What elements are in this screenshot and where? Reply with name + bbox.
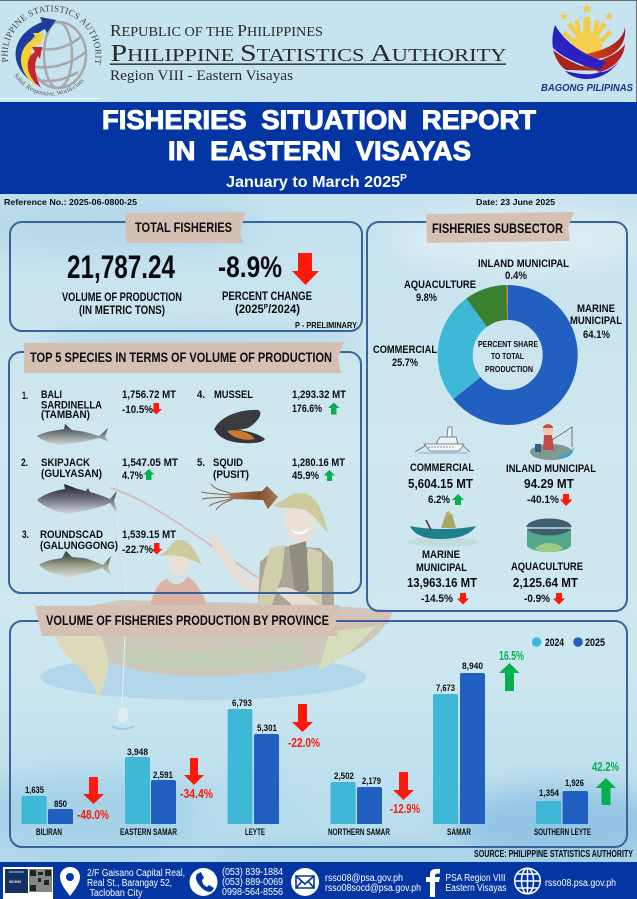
species 3: roundscad: ROUNDSCAD xyxy=(40,529,103,541)
subtitle: P xyxy=(400,173,407,184)
species 4: mussel: MUSSEL xyxy=(214,389,253,401)
icon: commercial fishing ship xyxy=(415,427,470,453)
icon: mussel xyxy=(214,410,265,443)
species 1: bali sardinella: -10.5% xyxy=(122,404,153,416)
label: aquaculture share xyxy=(404,279,476,304)
chart legend: 2025 xyxy=(585,637,605,649)
change: Samar xyxy=(499,648,524,691)
header: agency text: PHILIPPINE STATISTICS AUTHORITY xyxy=(110,41,506,67)
volume label: (IN METRIC TONS) xyxy=(79,303,165,317)
volume label xyxy=(62,290,182,317)
panel: total fisheries xyxy=(10,212,362,331)
bar group: Eastern Samar: EASTERN SAMAR xyxy=(120,827,177,837)
email addresses: rsso08socd@psa.gov.ph xyxy=(325,883,421,894)
donut centre label xyxy=(478,339,538,374)
change: Samar: 16.5% xyxy=(499,648,524,663)
percent change figure: -8.9% xyxy=(218,251,282,284)
bar group: Leyte: 5,301 xyxy=(257,723,278,734)
subtitle: January to March 2025 xyxy=(226,174,393,191)
species 4: mussel: 4. xyxy=(197,389,205,401)
icon: phone xyxy=(190,868,218,896)
bar group: Eastern Samar: 2,591 xyxy=(153,770,174,781)
species 2: skipjack: 2. xyxy=(21,457,28,469)
label: aquaculture share: 9.8% xyxy=(416,292,437,304)
aquaculture figures: -0.9% xyxy=(524,593,550,605)
panel: top 5 species xyxy=(9,342,361,593)
heading: top 5 species: TOP 5 SPECIES IN TERMS OF VOLUME OF PRODUCTION xyxy=(30,349,332,365)
label: commercial share: COMMERCIAL xyxy=(373,344,437,356)
top and right frame edges xyxy=(0,0,637,102)
icon: down arrow xyxy=(150,403,162,414)
address: Tacloban City xyxy=(90,888,142,899)
aquaculture figures xyxy=(511,518,583,605)
icon: aquaculture fish cage xyxy=(526,518,572,552)
heading: production by province: VOLUME OF FISHERIES PRODUCTION BY PROVINCE xyxy=(46,612,329,628)
bar group: Northern Samar: 2,179 xyxy=(362,776,381,787)
heading: production by province xyxy=(35,605,339,636)
species 1: bali sardinella: SARDINELLA xyxy=(41,400,102,412)
heading: total fisheries: TOTAL FISHERIES xyxy=(135,219,232,235)
label: inland municipal share xyxy=(478,258,569,282)
total volume figure: 21,787.24 xyxy=(67,249,175,285)
bar group: Biliran: 1,635 xyxy=(25,785,45,796)
volume label: VOLUME OF PRODUCTION xyxy=(62,290,182,304)
donut centre label: TO TOTAL xyxy=(491,351,524,361)
heading: top 5 species xyxy=(24,342,344,373)
icon: email xyxy=(291,868,319,896)
ISO badge and QR code: ISO 9001 xyxy=(9,879,22,884)
species 5: squid: SQUID xyxy=(213,457,243,469)
title: IN EASTERN VISAYAS xyxy=(168,136,471,166)
phone numbers: (053) 889-0069 xyxy=(222,877,283,888)
heading: fisheries subsector: FISHERIES SUBSECTOR xyxy=(432,220,563,236)
label: marine municipal share: MUNICIPAL xyxy=(570,315,622,327)
icon: large red down arrow xyxy=(292,253,319,285)
bar group: Southern Leyte: 1,926 xyxy=(565,778,584,789)
species 5: squid: 45.9% xyxy=(292,470,319,482)
bar group: Southern Leyte: 1,354 xyxy=(539,788,560,799)
facebook page: Eastern Visayas xyxy=(446,883,506,894)
bar group: Samar: SAMAR xyxy=(447,827,471,837)
change: Southern Leyte: 42.2% xyxy=(592,759,619,774)
icon: down arrow xyxy=(457,593,469,604)
bar group: Northern Samar: 2,502 xyxy=(334,771,354,782)
bar group: Biliran: 850 xyxy=(54,799,67,810)
bar group: Biliran: BILIRAN xyxy=(36,827,62,837)
commercial figures: COMMERCIAL xyxy=(410,462,474,474)
icon: up arrow xyxy=(452,494,464,505)
percent change label: P xyxy=(264,304,268,311)
inland municipal figures: 94.29 MT xyxy=(524,476,574,491)
label: commercial share xyxy=(373,344,437,369)
icon: globe xyxy=(515,868,540,894)
bar group: Northern Samar: NORTHERN SAMAR xyxy=(328,827,390,837)
change: Northern Samar: -12.9% xyxy=(390,801,420,816)
species 3: roundscad: 1,539.15 MT xyxy=(122,529,176,541)
marine municipal figures: 13,963.16 MT xyxy=(407,575,477,590)
bar group: Leyte xyxy=(228,698,320,837)
species 3: roundscad xyxy=(22,529,176,580)
bar group: Southern Leyte xyxy=(534,759,619,837)
chart legend: 2024 xyxy=(545,637,565,649)
commercial figures: 5,604.15 MT xyxy=(408,476,473,491)
aquaculture figures: 2,125.64 MT xyxy=(513,575,578,590)
address xyxy=(87,868,185,899)
header: agency text xyxy=(110,21,506,84)
watercolor background xyxy=(0,194,637,869)
percent change label: PERCENT CHANGE xyxy=(222,289,312,303)
label: inland municipal share: INLAND MUNICIPAL xyxy=(478,258,569,270)
header: PSA logo xyxy=(0,5,102,99)
bar group: Biliran xyxy=(22,777,109,837)
species 2: skipjack: (GULYASAN) xyxy=(41,468,102,480)
bar group: Samar: 8,940 xyxy=(462,661,483,672)
change: Biliran: -48.0% xyxy=(77,807,109,822)
species 3: roundscad: 3. xyxy=(22,529,29,541)
email addresses xyxy=(325,873,421,894)
icon: location pin xyxy=(60,867,80,896)
bar group: Eastern Samar xyxy=(120,747,213,837)
species 4: mussel xyxy=(197,389,346,443)
phone numbers: 0998-564-8556 xyxy=(222,887,283,898)
marine municipal figures: -14.5% xyxy=(421,593,453,605)
species 1: bali sardinella: 1. xyxy=(22,390,28,402)
bar group: Southern Leyte: SOUTHERN LEYTE xyxy=(534,827,591,837)
species 2: skipjack xyxy=(21,457,178,514)
icon: down arrow xyxy=(553,593,565,604)
icon: up arrow xyxy=(328,402,340,414)
icon: up arrow xyxy=(324,470,335,481)
website: rsso08.psa.gov.ph xyxy=(545,878,616,889)
icon: down arrow xyxy=(560,494,572,506)
inland municipal figures: -40.1% xyxy=(527,494,559,506)
donut centre label: PERCENT SHARE xyxy=(478,339,538,349)
change: Leyte: -22.0% xyxy=(288,735,320,750)
bar group: Samar: 7,673 xyxy=(436,683,455,694)
label: inland municipal share: 0.4% xyxy=(505,270,527,282)
header: agency text: REPUBLIC OF THE PHILIPPINES xyxy=(110,21,323,40)
label: commercial share: 25.7% xyxy=(392,357,418,369)
title banner xyxy=(0,102,637,194)
date: Date: 23 June 2025 xyxy=(476,197,555,207)
species 2: skipjack: 4.7% xyxy=(122,470,143,482)
species 2: skipjack: 1,547.05 MT xyxy=(122,457,178,469)
bar group: Northern Samar xyxy=(328,771,420,837)
species 5: squid: 1,280.16 MT xyxy=(292,457,345,469)
label: marine municipal share xyxy=(570,303,622,341)
icon: facebook xyxy=(426,869,440,897)
species 3: roundscad: (GALUNGGONG) xyxy=(40,540,118,552)
chart legend xyxy=(532,637,605,649)
phone numbers xyxy=(222,867,283,898)
species 5: squid xyxy=(197,457,345,510)
donut chart: percent share xyxy=(455,302,560,408)
aquaculture figures: AQUACULTURE xyxy=(511,561,583,573)
heading: fisheries subsector xyxy=(426,212,574,243)
icon: down arrow xyxy=(151,543,162,554)
species 3: roundscad: -22.7% xyxy=(122,544,153,556)
bar group: Samar xyxy=(433,648,524,837)
icon: marine municipal boat xyxy=(408,512,478,547)
label: aquaculture share: AQUACULTURE xyxy=(404,279,476,291)
faded illustration: father and child fishing in a boat xyxy=(40,480,393,729)
donut centre label: PRODUCTION xyxy=(485,364,533,374)
percent change label: /2024) xyxy=(268,302,300,316)
icon: up arrow xyxy=(143,469,154,480)
bar group: Leyte: LEYTE xyxy=(245,827,265,837)
species 1: bali sardinella: (TAMBAN) xyxy=(41,409,90,421)
icon: inland fisher xyxy=(530,424,574,460)
bar group: Eastern Samar: 3,948 xyxy=(127,747,148,758)
inland municipal figures: INLAND MUNICIPAL xyxy=(506,463,596,475)
species 1: bali sardinella: 1,756.72 MT xyxy=(122,389,176,401)
species 4: mussel: 176.6% xyxy=(292,403,322,415)
phone numbers: (053) 839-1884 xyxy=(222,867,283,878)
label: marine municipal share: MARINE xyxy=(577,303,615,315)
email addresses: rsso08@psa.gov.ph xyxy=(325,873,403,884)
icon: squid xyxy=(201,484,278,510)
heading: total fisheries xyxy=(125,212,246,243)
title: FISHERIES SITUATION REPORT xyxy=(102,105,537,135)
facebook page: PSA Region VIII xyxy=(446,873,506,884)
percent change label xyxy=(222,289,312,316)
icon: roundscad fish xyxy=(39,551,111,580)
species 1: bali sardinella xyxy=(22,389,176,445)
title xyxy=(102,105,537,166)
change: Eastern Samar: -34.4% xyxy=(180,786,213,801)
header: PSA logo: Solid. Responsive. World-class xyxy=(14,74,84,96)
species 1: bali sardinella: BALI xyxy=(41,389,62,401)
header: agency text: Region VIII - Eastern Visayas xyxy=(110,68,293,84)
species 5: squid: 5. xyxy=(197,457,205,469)
species 2: skipjack: SKIPJACK xyxy=(41,457,90,469)
facebook page xyxy=(446,873,506,894)
address: 2/F Gaisano Capital Real, xyxy=(87,868,185,879)
commercial figures xyxy=(408,427,474,506)
inland municipal figures xyxy=(506,424,596,506)
species 4: mussel: 1,293.32 MT xyxy=(292,389,346,401)
label: marine municipal share: 64.1% xyxy=(583,329,610,341)
reference number: Reference No.: 2025-06-0800-25 xyxy=(4,197,137,207)
icon: skipjack fish xyxy=(37,484,118,514)
bar group: Leyte: 6,793 xyxy=(232,698,252,709)
icon: sardinella fish xyxy=(37,424,109,445)
panel: production by province xyxy=(10,605,627,847)
header: Bagong Pilipinas logo xyxy=(541,4,633,94)
address: Real St., Barangay 52, xyxy=(87,878,172,889)
marine municipal figures: MUNICIPAL xyxy=(416,562,467,574)
species 5: squid: (PUSIT) xyxy=(213,469,249,481)
panel: fisheries subsector xyxy=(367,212,627,611)
percent change label: (2025 xyxy=(235,302,266,316)
footer bar xyxy=(0,862,637,899)
marine municipal figures xyxy=(407,512,478,605)
preliminary note: P - PRELIMINARY xyxy=(295,320,357,330)
ISO badge and QR code xyxy=(3,867,53,899)
marine municipal figures: MARINE xyxy=(422,549,460,561)
commercial figures: 6.2% xyxy=(428,494,450,506)
